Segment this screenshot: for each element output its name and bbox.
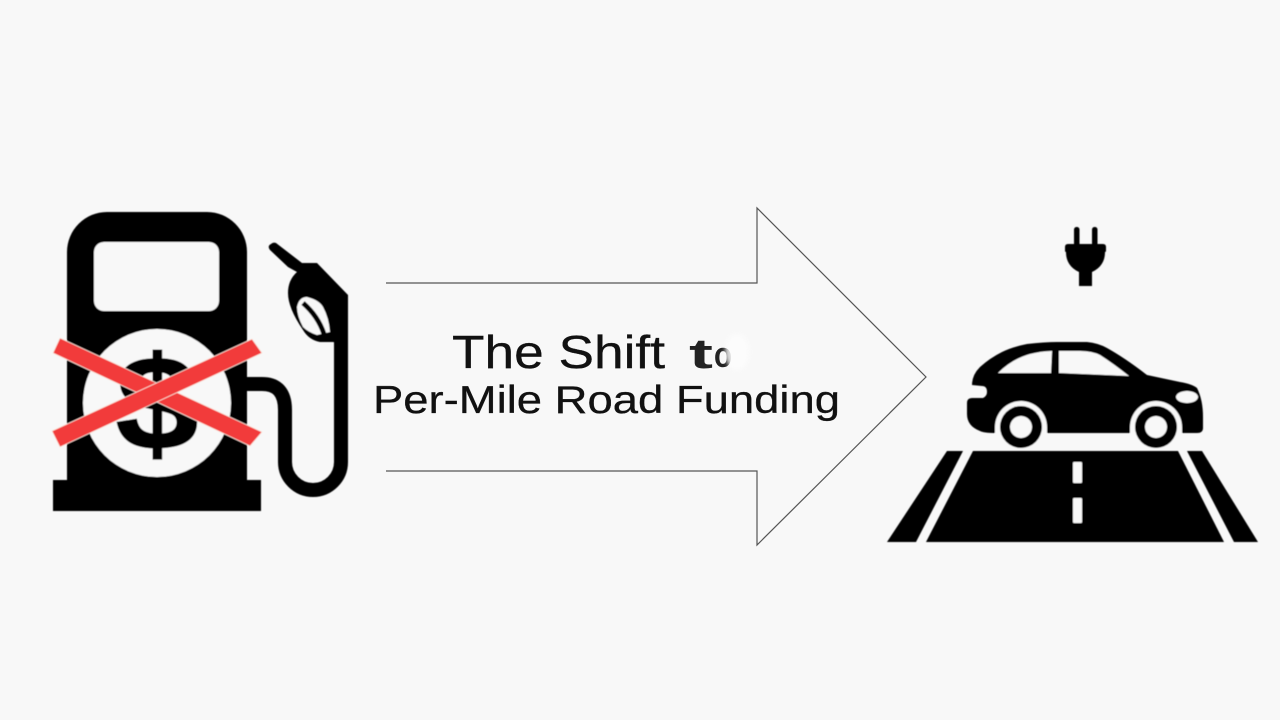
lane dash upper (1073, 462, 1082, 483)
road surface (926, 451, 1224, 542)
fuel hose (247, 340, 341, 490)
arrow outline (386, 208, 926, 545)
fuel nozzle (269, 243, 348, 345)
lane dash lower (1073, 498, 1082, 523)
title line 2: Per-Mile Road Funding (373, 379, 840, 422)
right road edge (1187, 451, 1258, 542)
pump display screen (94, 242, 219, 311)
rear wheel (995, 401, 1047, 450)
icon: road (887, 451, 1258, 542)
icon: crossed-out gas pump (52, 212, 348, 511)
front wheel (1130, 401, 1182, 450)
pump body (53, 212, 261, 511)
rear window (998, 351, 1052, 373)
coin circle (83, 329, 231, 477)
title (373, 326, 840, 422)
title line 1 (452, 326, 749, 378)
icon: electric car (967, 342, 1203, 450)
title line 1: t (689, 330, 713, 377)
red X mark (52, 338, 262, 447)
car body (967, 342, 1203, 433)
title line 1: o (714, 334, 732, 375)
icon: electric plug (1065, 227, 1106, 286)
title line 1: The Shift (452, 326, 665, 378)
left road edge (887, 451, 963, 542)
dollar sign: $ (116, 328, 198, 477)
front window (1059, 351, 1129, 376)
headlight (1176, 391, 1198, 403)
